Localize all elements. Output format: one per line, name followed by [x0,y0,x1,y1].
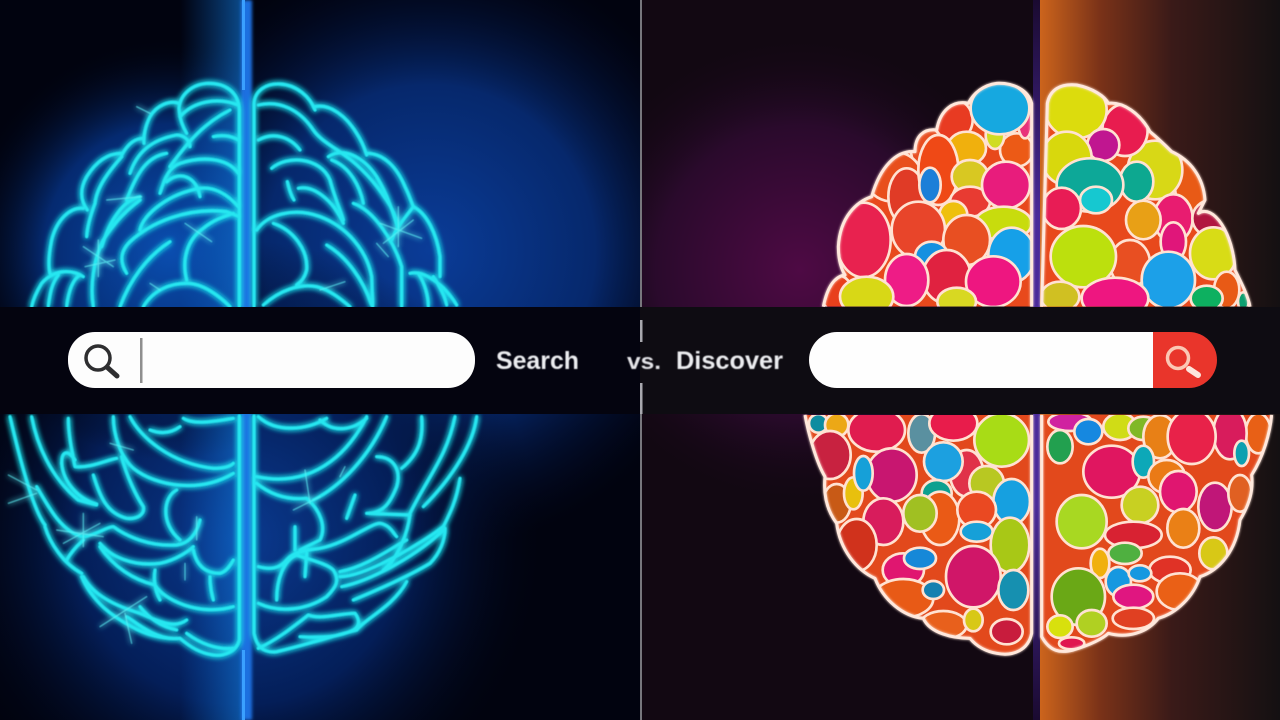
brain: multicoloured lobes, lower half [800,406,1277,660]
brain: multicoloured lobes, upper half [820,80,1253,319]
band: search bar strip [0,307,1280,414]
search button [1153,332,1217,388]
search box: right [809,332,1217,388]
brain: blue neon outline, lower half [8,416,477,655]
lobes [809,406,1271,649]
lobe outline [823,83,1250,307]
icon: magnifying glass, red button [1168,348,1198,375]
lobes [821,82,1249,319]
lobe outline [805,415,1272,654]
text cursor [140,338,142,383]
panel: blue search background [0,0,641,720]
centre divider [640,0,642,720]
panel: colourful discover background [641,0,1280,720]
brain: blue neon outline, upper half [32,83,457,307]
icon: magnifying glass [86,346,117,376]
search box: left [68,332,475,388]
label: Search: Search [496,347,579,375]
label: Discover: Discover [676,347,783,375]
label: vs.: vs. [627,349,661,374]
